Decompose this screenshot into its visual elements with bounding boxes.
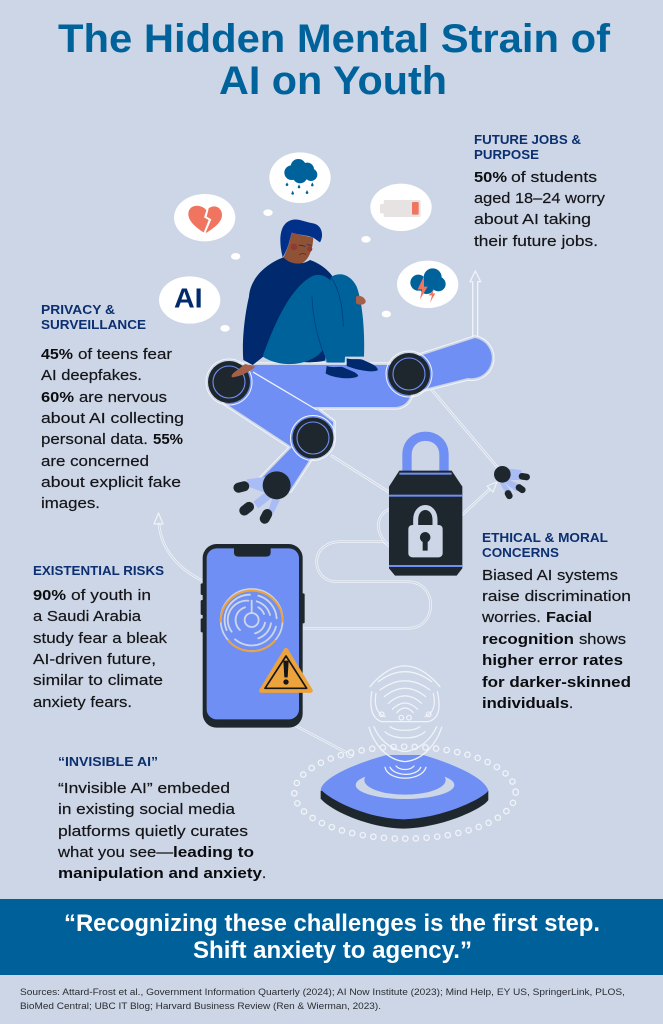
icon: padlock (389, 436, 462, 576)
text: existential risks: a Saudi Arabia (33, 608, 142, 625)
title: The Hidden Mental Strain of (58, 17, 611, 61)
wire: elbow to lock (332, 456, 392, 494)
joint: elbow (290, 416, 336, 460)
bubble: broken heart (174, 194, 235, 241)
back leg (327, 274, 364, 357)
text: invisible AI: platforms quietly curates (58, 823, 248, 840)
arrow: up to privacy (154, 513, 203, 581)
sources (20, 987, 625, 1012)
text: existential risks: EXISTENTIAL RISKS (33, 564, 164, 578)
text: invisible AI: “Invisible AI” embeded (58, 780, 230, 797)
quote banner: “Recognizing these challenges is the first step. (64, 910, 600, 937)
text: invisible AI: manipulation and anxiety (58, 865, 263, 882)
icon: hologram fingerprint (369, 666, 442, 778)
text: existential risks: 90% (33, 587, 66, 604)
sources: BioMed Central; UBC IT Blog; Harvard Business Review (Ren & Wierman, 2023). (20, 1001, 381, 1012)
phone body (201, 544, 305, 728)
quote banner (0, 899, 663, 975)
text: ethical and moral concerns (481, 531, 631, 712)
text: ethical and moral concerns: for darker-skinned (482, 674, 631, 691)
bubble: AI (159, 276, 220, 324)
thought bubbles (159, 152, 458, 332)
text: privacy and surveillance (41, 303, 184, 512)
bubble: AI: AI (174, 283, 203, 314)
text: privacy and surveillance: AI deepfakes. (41, 367, 142, 384)
text: ethical and moral concerns: individuals (482, 695, 569, 712)
text: ethical and moral concerns: Biased AI systems (482, 567, 618, 584)
text: privacy and surveillance: of teens fear (78, 346, 172, 363)
icon: warning triangle (261, 650, 311, 691)
text: invisible AI: leading to (173, 844, 254, 861)
text: privacy and surveillance: 45% (41, 346, 73, 363)
text: future jobs: their future jobs. (474, 233, 598, 250)
text: invisible AI: what you see— (57, 844, 173, 861)
text: privacy and surveillance: are nervous (79, 389, 167, 406)
text: ethical and moral concerns: worries. (481, 609, 541, 626)
text: invisible AI (57, 755, 266, 882)
bubble: low battery (370, 184, 432, 231)
knee hand (356, 296, 366, 305)
quote banner: Shift anxiety to agency.” (193, 937, 472, 964)
text: existential risks: of youth in (71, 587, 151, 604)
text: invisible AI: in existing social media (58, 801, 236, 818)
left hand (232, 364, 255, 377)
text: existential risks: similar to climate (33, 672, 163, 689)
title: AI on Youth (219, 59, 447, 103)
text: future jobs: of students (511, 169, 597, 186)
text: ethical and moral concerns: . (569, 695, 573, 712)
person sitting on robot arm (232, 220, 378, 378)
icon: fingerprint scan (221, 589, 283, 651)
text: existential risks: study fear a bleak (33, 630, 168, 647)
text: future jobs: FUTURE JOBS & (474, 133, 581, 147)
text: privacy and surveillance: 55% (153, 431, 183, 448)
text: privacy and surveillance: about explicit fake (41, 474, 181, 491)
text: future jobs: about AI taking (474, 211, 591, 228)
text: privacy and surveillance: PRIVACY & (41, 303, 115, 317)
title (58, 17, 611, 103)
text: ethical and moral concerns: higher error rates (482, 652, 623, 669)
text: ethical and moral concerns: shows (579, 631, 626, 648)
joint: shoulder (206, 359, 252, 405)
arm body (225, 338, 492, 490)
text: ethical and moral concerns: CONCERNS (482, 546, 559, 560)
platform base (321, 755, 488, 829)
neck and face (283, 233, 313, 265)
bubble: rain cloud (269, 152, 331, 203)
fingerprint platform (294, 666, 516, 839)
sweater (243, 257, 333, 365)
shoes (326, 358, 378, 378)
dotted ring (294, 747, 516, 839)
arrow: up to future jobs (470, 271, 481, 337)
joint: centre (386, 351, 432, 397)
text: privacy and surveillance: images. (41, 495, 100, 512)
bubble: storm cloud (397, 261, 458, 308)
text: existential risks: anxiety fears. (33, 694, 132, 711)
text: invisible AI: “INVISIBLE AI” (58, 755, 158, 769)
text: privacy and surveillance: about AI collecting (41, 410, 184, 427)
text: ethical and moral concerns: recognition (482, 631, 574, 648)
connecting wires and arrows (154, 271, 498, 758)
text: ethical and moral concerns: ETHICAL & MORAL (482, 531, 608, 545)
text: existential risks (33, 564, 168, 711)
text: invisible AI: . (262, 865, 266, 882)
phone with fingerprint (201, 544, 311, 728)
text: future jobs: aged 18–24 worry (474, 190, 606, 207)
robot hand left (232, 471, 291, 525)
text: privacy and surveillance: 60% (41, 389, 74, 406)
small thought dots (220, 209, 391, 332)
arrow: lock to right hand (463, 482, 497, 514)
robot arm (206, 338, 530, 525)
text: future jobs: PURPOSE (474, 148, 539, 162)
robot hand right (494, 466, 530, 500)
wire: phone to lock snake (303, 508, 431, 628)
wire: phone to platform (296, 726, 354, 758)
text: ethical and moral concerns: Facial (546, 609, 592, 626)
text: ethical and moral concerns: raise discrimination (482, 588, 631, 605)
text: future jobs (474, 133, 606, 250)
text: privacy and surveillance: personal data. (41, 431, 148, 448)
text: privacy and surveillance: SURVEILLANCE (41, 318, 146, 332)
front leg (263, 275, 346, 364)
sources: Sources: Attard-Frost et al., Government Information Quarterly (2024); AI Now Institute (2023); Mind Help, EY US, SpringerLink, PLOS, (20, 987, 625, 998)
text: existential risks: AI-driven future, (33, 651, 156, 668)
text: privacy and surveillance: are concerned (41, 453, 149, 470)
wire: arm to right hand (432, 390, 498, 468)
hair (280, 220, 322, 257)
text: future jobs: 50% (474, 169, 507, 186)
